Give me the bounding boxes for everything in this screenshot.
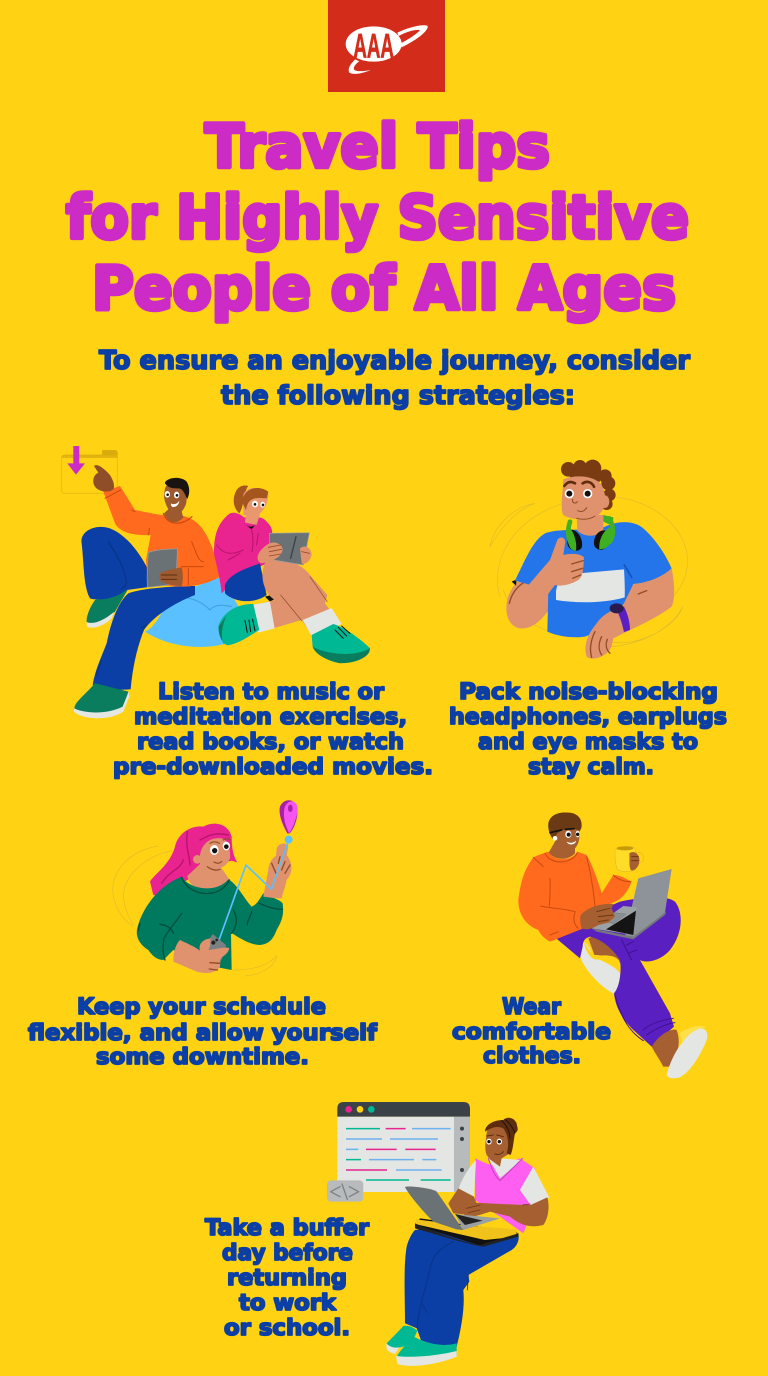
caption: headphones: and eye masks to	[478, 730, 698, 755]
caption: clothes: clothes.	[483, 1044, 581, 1069]
title: for Highly Sensitive	[66, 183, 689, 253]
purple pants	[555, 897, 681, 1047]
subtitle	[99, 346, 690, 411]
torso and arms	[475, 1158, 537, 1233]
woman reading	[214, 485, 370, 663]
caption: clothes	[452, 995, 611, 1069]
face	[200, 838, 230, 870]
caption: listen: read books, or watch	[137, 730, 404, 755]
raised hand	[263, 843, 291, 898]
shirt	[515, 522, 672, 637]
title	[66, 112, 689, 324]
hand on keyboard	[580, 904, 615, 929]
caption: buffer day: to work	[239, 1291, 337, 1316]
watch	[617, 607, 630, 632]
illustration: person with laptop and mug	[518, 812, 707, 1078]
icon: download folder	[62, 446, 118, 493]
laptop and lap tray	[405, 1187, 518, 1247]
caption: listen	[113, 680, 433, 780]
man	[74, 465, 220, 718]
caption: headphones: headphones, earplugs	[449, 705, 727, 730]
logo: AAA: AAA	[353, 28, 394, 66]
code tag icon	[327, 1180, 363, 1202]
phone and hand	[173, 934, 229, 973]
sweater	[137, 877, 283, 970]
head	[485, 1124, 512, 1167]
illustration: two friends on a bean bag with tablet and book	[62, 446, 370, 718]
neck and head	[577, 515, 603, 536]
caption: clothes: Wear	[502, 995, 561, 1020]
illustration: browser window and person with laptop	[327, 1102, 549, 1366]
caption: schedule: some downtime.	[96, 1045, 309, 1070]
subtitle: To ensure an enjoyable journey, consider	[99, 346, 690, 376]
motion lines	[490, 497, 687, 647]
caption: listen: Listen to music or	[158, 680, 384, 705]
browser window	[337, 1102, 470, 1192]
caption: buffer day: or school.	[224, 1316, 350, 1341]
orange sweater	[518, 852, 632, 942]
logo: AAA	[328, 0, 445, 92]
title: People of All Ages	[92, 254, 676, 324]
caption: clothes: comfortable	[452, 1020, 611, 1045]
caption: schedule: Keep your schedule	[77, 995, 326, 1020]
lower leg and shoe	[652, 1030, 679, 1067]
subtitle: the following strategies:	[221, 381, 575, 411]
caption: listen: meditation exercises,	[134, 705, 407, 730]
caption: buffer day: Take a buffer	[205, 1216, 369, 1241]
illustration: woman with phone and map pin	[113, 800, 298, 976]
pants	[405, 1229, 519, 1347]
mug	[615, 846, 644, 872]
motion lines	[113, 846, 277, 976]
caption: listen: pre-downloaded movies.	[113, 755, 433, 780]
caption: buffer day: returning	[227, 1266, 347, 1291]
hair	[150, 824, 237, 897]
caption: buffer day: day before	[222, 1241, 353, 1266]
shoes	[387, 1326, 417, 1349]
route line and map pin	[219, 800, 298, 939]
caption: schedule: flexible, and allow yourself	[28, 1021, 377, 1046]
bean bag	[145, 577, 253, 647]
far leg with shoe	[588, 936, 632, 963]
headphones	[567, 515, 614, 551]
title: Travel Tips	[205, 112, 550, 182]
caption: headphones: stay calm.	[528, 755, 654, 780]
caption: headphones	[449, 680, 727, 780]
thumb up hand	[511, 538, 584, 628]
head	[549, 822, 580, 859]
caption: schedule	[28, 995, 377, 1070]
caption: buffer day	[205, 1216, 369, 1341]
neck	[187, 864, 229, 891]
caption: headphones: Pack noise-blocking	[459, 680, 718, 705]
illustration: man with headphones and thumbs up	[490, 460, 687, 659]
right arm	[585, 568, 674, 659]
laptop	[592, 869, 672, 939]
arm behind	[506, 577, 557, 628]
